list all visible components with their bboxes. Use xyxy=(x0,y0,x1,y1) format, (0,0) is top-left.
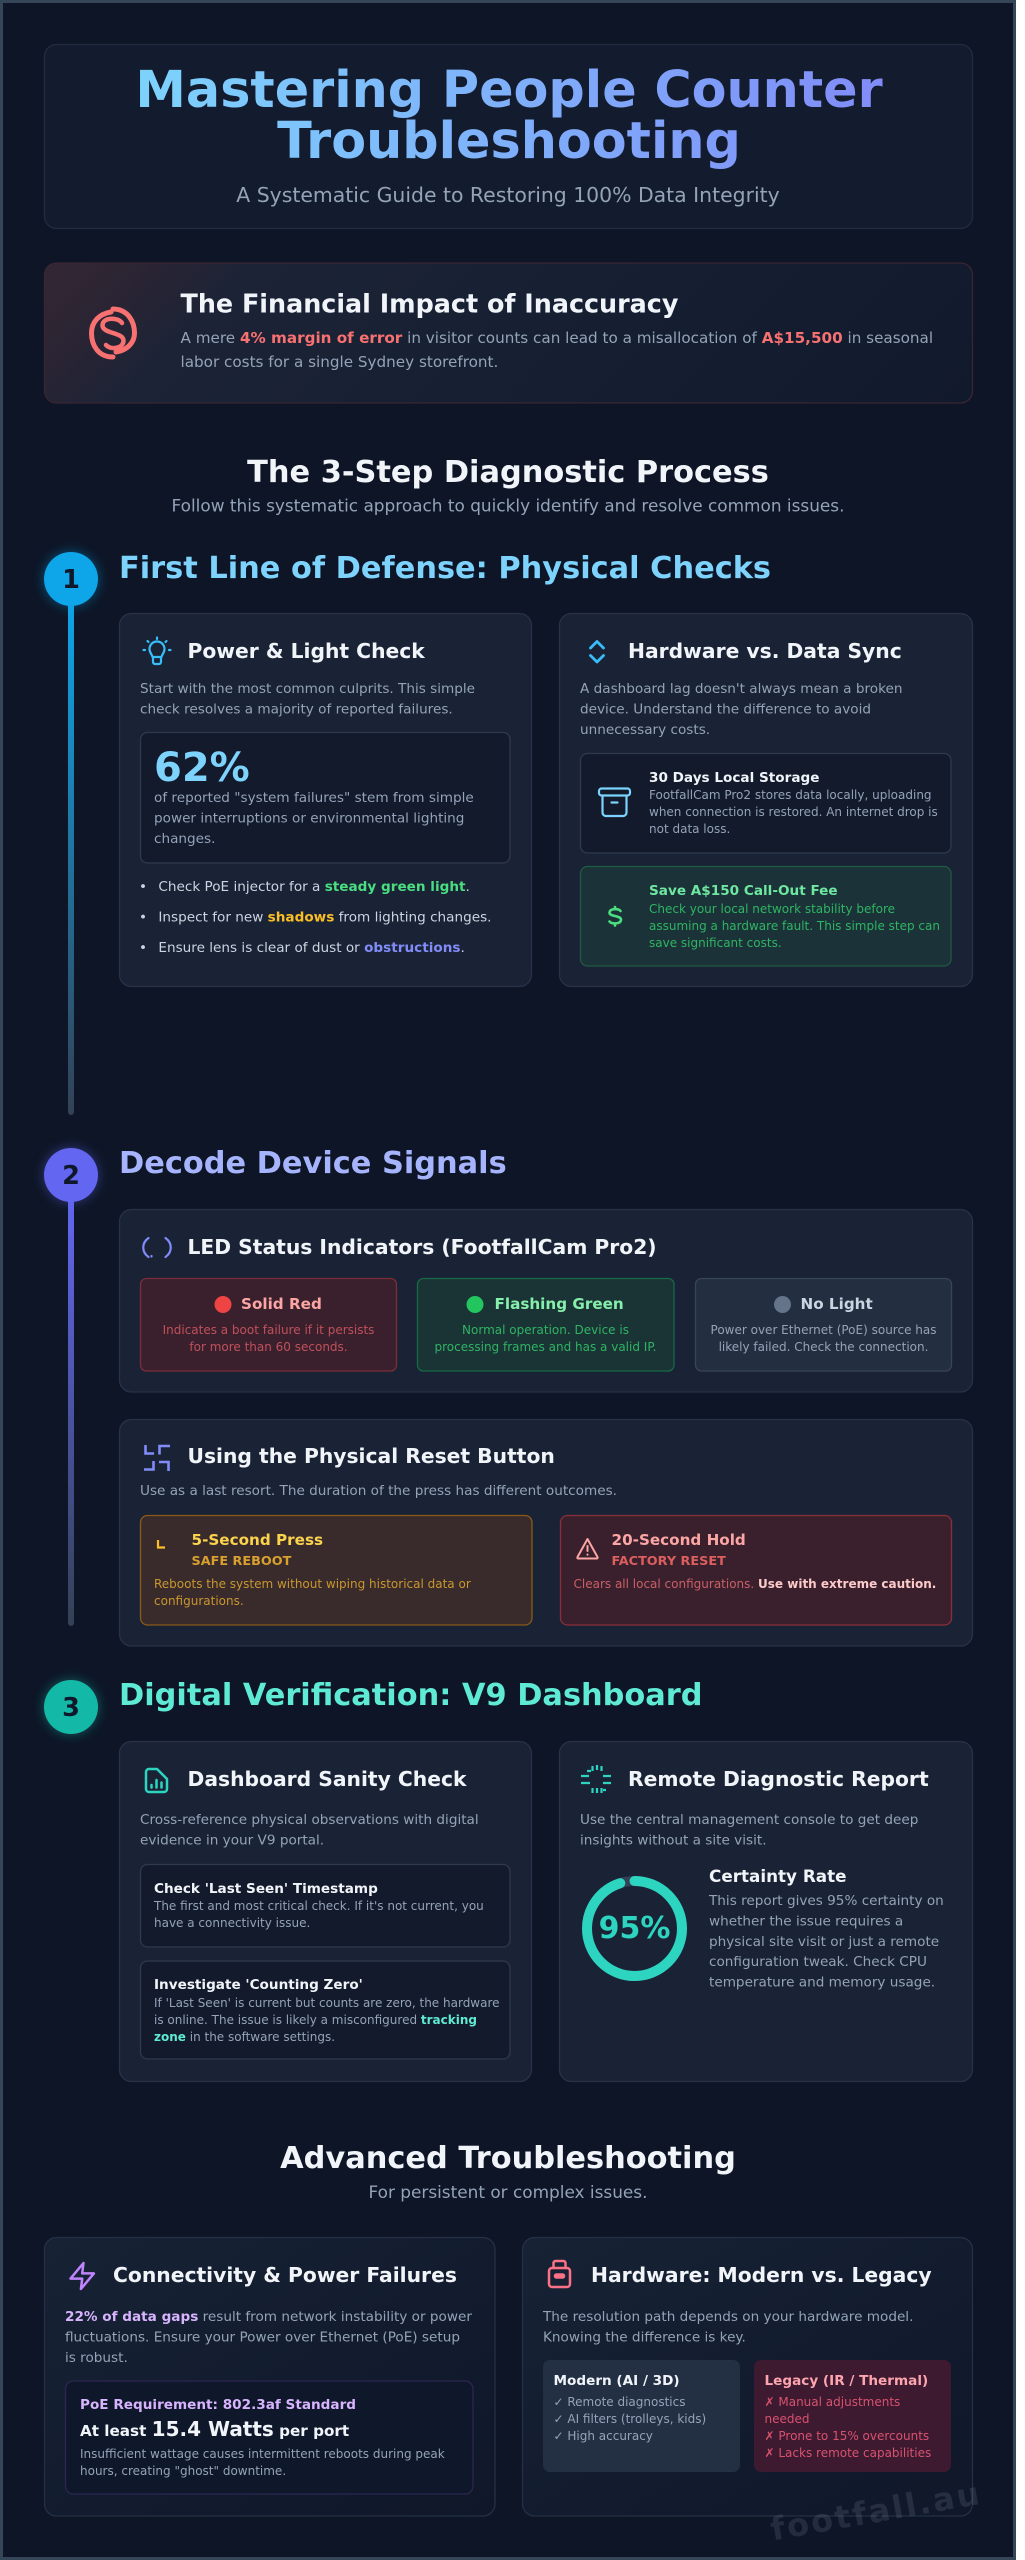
step badge 2: 2 xyxy=(62,1161,80,1191)
card description: insights without a site visit. xyxy=(580,1832,767,1848)
donut chart: 95%: 95% xyxy=(599,1911,670,1946)
option: 5-second press: 5-Second Press xyxy=(192,1531,323,1549)
card description: unnecessary costs. xyxy=(580,722,710,738)
card description xyxy=(542,2309,913,2346)
option: 20-second hold: Clears all local configurations. Use with extreme caution. xyxy=(574,1577,936,1591)
step 2 heading: Decode Device Signals xyxy=(119,1146,507,1181)
callout: PoE requirement: hours, creating "ghost" downtime. xyxy=(80,2464,286,2478)
card description: Use the central management console to get deep xyxy=(580,1812,918,1828)
panel: dashboard sanity check xyxy=(120,1742,532,2082)
alert text: A mere 4% margin of error in visitor counts can lead to a misallocation of A$15,500 in seasonal xyxy=(180,329,933,347)
step 1 heading: First Line of Defense: Physical Checks xyxy=(119,551,771,586)
check: last seen: The first and most critical check. If it's not current, you xyxy=(153,1899,484,1913)
card description: Knowing the difference is key. xyxy=(543,2330,746,2346)
check: counting zero: If 'Last Seen' is current but counts are zero, the hardware xyxy=(154,1996,500,2010)
panel: financial impact alert xyxy=(44,263,972,403)
callout: PoE requirement xyxy=(66,2381,473,2494)
step badge 1: 1 xyxy=(62,565,80,595)
callout: call-out fee saving xyxy=(580,866,951,966)
status: solid red: Indicates a boot failure if it persists xyxy=(163,1323,374,1337)
callout: local storage xyxy=(580,754,951,853)
card description: device. Understand the difference to avoid xyxy=(580,702,871,718)
card description: Use as a last resort. The duration of the press has different outcomes. xyxy=(140,1483,617,1499)
card title: Remote Diagnostic Report xyxy=(628,1767,929,1791)
option: 5-second press xyxy=(140,1516,532,1625)
status: no light: likely failed. Check the connection. xyxy=(719,1340,928,1354)
callout: PoE requirement: PoE Requirement: 802.3af Standard xyxy=(80,2397,356,2413)
callout: call-out fee saving: save significant costs. xyxy=(649,936,782,950)
callout: PoE requirement: At least 15.4 Watts per port xyxy=(80,2417,349,2441)
icon: lightning xyxy=(70,2263,94,2289)
icon: archive box xyxy=(599,788,630,816)
callout: local storage: 30 Days Local Storage xyxy=(649,770,819,786)
panel: connectivity and power failures xyxy=(44,2238,495,2516)
check: last seen: Check 'Last Seen' Timestamp xyxy=(154,1881,378,1897)
option: 5-second press: Reboots the system without wiping historical data or xyxy=(154,1577,471,1591)
title xyxy=(135,60,883,170)
card description: check resolves a majority of reported failures. xyxy=(140,702,453,718)
option: 5-second press: configurations. xyxy=(154,1594,244,1608)
section heading: advanced troubleshooting xyxy=(280,2141,736,2202)
status: no light xyxy=(696,1278,952,1371)
check: counting zero xyxy=(140,1961,510,2059)
card description: fluctuations. Ensure your Power over Ethernet (PoE) setup xyxy=(65,2330,460,2346)
card description: The resolution path depends on your hardware model. xyxy=(542,2309,913,2325)
certainty text: This report gives 95% certainty on xyxy=(708,1893,944,1909)
comparison: modern: Modern (AI / 3D) xyxy=(554,2373,680,2389)
panel: physical reset button xyxy=(120,1420,972,1646)
panel: hardware modern vs legacy xyxy=(522,2238,972,2516)
card title: LED Status Indicators (FootfallCam Pro2) xyxy=(188,1235,657,1259)
certainty text: physical site visit or just a remote xyxy=(709,1934,939,1950)
comparison: legacy: ✗ Manual adjustments xyxy=(764,2395,900,2409)
card description xyxy=(65,2309,472,2366)
section heading: 3-step process: The 3-Step Diagnostic Process xyxy=(247,455,769,490)
check: counting zero: zone in the software settings. xyxy=(154,2030,335,2044)
card description: Start with the most common culprits. This simple xyxy=(140,681,475,697)
comparison: modern: ✓ Remote diagnostics xyxy=(554,2395,686,2409)
status: solid red: Solid Red xyxy=(241,1295,322,1313)
panel: header xyxy=(44,44,972,228)
certainty text: whether the issue requires a xyxy=(709,1914,903,1930)
card title: Connectivity & Power Failures xyxy=(113,2263,457,2287)
title: Troubleshooting xyxy=(277,111,741,170)
option: 20-second hold xyxy=(560,1516,952,1625)
check: last seen: have a connectivity issue. xyxy=(154,1916,310,1930)
card title: Hardware vs. Data Sync xyxy=(628,639,902,663)
callout: PoE requirement: Insufficient wattage causes intermittent reboots during peak xyxy=(80,2447,445,2461)
icon: chevrons xyxy=(590,642,604,662)
timeline line: step 1 xyxy=(68,600,74,1115)
comparison: modern: ✓ High accuracy xyxy=(554,2429,653,2443)
status: flashing green xyxy=(418,1278,674,1371)
checklist: Ensure lens is clear of dust or obstructions. xyxy=(158,940,465,956)
title: Mastering People Counter xyxy=(135,60,883,119)
card title: Power & Light Check xyxy=(188,639,425,663)
panel: LED status indicators xyxy=(120,1210,972,1392)
icon: minimize corners xyxy=(144,1445,170,1471)
icon: file chart xyxy=(146,1769,167,1792)
icon: warning triangle xyxy=(577,1539,598,1558)
callout: call-out fee saving: assuming a hardware fault. This simple step can xyxy=(649,919,940,933)
certainty text xyxy=(708,1866,944,1990)
comparison: legacy: ✗ Prone to 15% overcounts xyxy=(764,2429,929,2443)
section heading: 3-step process: Follow this systematic approach to quickly identify and resolve common issues. xyxy=(172,496,844,516)
alert text: labor costs for a single Sydney storefront. xyxy=(180,353,498,371)
callout: local storage: FootfallCam Pro2 stores data locally, uploading xyxy=(649,788,932,802)
card description xyxy=(580,681,902,738)
card description: is robust. xyxy=(65,2350,128,2366)
comparison: modern: ✓ AI filters (trolleys, kids) xyxy=(554,2412,706,2426)
status: solid red: for more than 60 seconds. xyxy=(189,1340,348,1354)
comparison: legacy: ✗ Lacks remote capabilities xyxy=(764,2446,931,2460)
stat box: 62%: power interruptions or environmental lighting xyxy=(154,810,464,826)
certainty text: configuration tweak. Check CPU xyxy=(709,1954,927,1970)
checklist: • xyxy=(139,879,147,895)
comparison: legacy xyxy=(754,2360,951,2472)
subtitle: A Systematic Guide to Restoring 100% Data Integrity xyxy=(236,183,780,207)
status: no light: No Light xyxy=(800,1295,873,1313)
stat box: 62%: changes. xyxy=(154,831,215,847)
panel: power and light check xyxy=(120,614,532,986)
check: counting zero: Investigate 'Counting Zero' xyxy=(154,1977,363,1993)
card description: Cross-reference physical observations with digital xyxy=(140,1812,479,1828)
step badge 3: 3 xyxy=(62,1693,80,1723)
status: no light: Power over Ethernet (PoE) source has xyxy=(711,1323,936,1337)
icon: LED arcs xyxy=(143,1238,171,1257)
panel: hardware vs data sync xyxy=(560,614,972,986)
card description: A dashboard lag doesn't always mean a broken xyxy=(580,681,902,697)
checklist: • xyxy=(139,910,147,926)
timeline line: step 2 xyxy=(68,1196,74,1626)
card title: Hardware: Modern vs. Legacy xyxy=(591,2263,932,2287)
card description: 22% of data gaps result from network instability or power xyxy=(65,2309,472,2325)
status: flashing green: Normal operation. Device is xyxy=(462,1323,629,1337)
checklist: • xyxy=(139,940,147,956)
comparison: legacy: Legacy (IR / Thermal) xyxy=(764,2373,928,2389)
section heading: advanced troubleshooting: Advanced Troubleshooting xyxy=(280,2141,736,2176)
option: 20-second hold: 20-Second Hold xyxy=(612,1531,746,1549)
donut chart: 95% xyxy=(587,1881,682,1976)
checklist: Inspect for new shadows from lighting changes. xyxy=(158,910,492,926)
icon: clock hand xyxy=(158,1540,165,1548)
icon: dollar circle xyxy=(92,309,134,357)
alert heading: The Financial Impact of Inaccuracy xyxy=(180,288,679,318)
card description xyxy=(140,681,475,718)
certainty text: temperature and memory usage. xyxy=(709,1974,935,1990)
comparison: legacy: needed xyxy=(764,2412,810,2426)
icon: chip ticks xyxy=(581,1765,611,1793)
check: counting zero: is online. The issue is likely a misconfigured tracking xyxy=(154,2013,477,2027)
step badge 2 xyxy=(44,1148,98,1202)
certainty text: Certainty Rate xyxy=(709,1866,846,1886)
callout: call-out fee saving: Check your local network stability before xyxy=(649,902,895,916)
callout: call-out fee saving: Save A$150 Call-Out Fee xyxy=(649,883,838,899)
status: flashing green: processing frames and has a valid IP. xyxy=(434,1340,656,1354)
stat box: 62%: of reported "system failures" stem from simple xyxy=(154,790,474,806)
card description xyxy=(140,1812,479,1848)
icon: dollar xyxy=(609,907,621,926)
callout: local storage: not data loss. xyxy=(649,822,730,836)
icon: battery xyxy=(549,2261,570,2287)
stat box: 62% xyxy=(140,732,510,863)
option: 5-second press: SAFE REBOOT xyxy=(192,1554,292,1569)
check: last seen xyxy=(140,1864,510,1947)
panel: remote diagnostic report xyxy=(560,1742,972,2082)
watermark: footfall.au xyxy=(768,2474,985,2548)
checklist xyxy=(139,879,492,956)
stat box: 62%: 62% xyxy=(154,745,250,791)
checklist: Check PoE injector for a steady green light. xyxy=(158,879,470,895)
step 3 heading: Digital Verification: V9 Dashboard xyxy=(119,1678,703,1713)
callout: local storage: when connection is restored. An internet drop is xyxy=(649,805,938,819)
card title: Using the Physical Reset Button xyxy=(188,1444,555,1468)
section heading: advanced troubleshooting: For persistent or complex issues. xyxy=(369,2182,647,2202)
status: solid red xyxy=(140,1278,396,1371)
section heading: 3-step process xyxy=(172,455,844,516)
card description xyxy=(580,1812,918,1848)
icon: light bulb xyxy=(144,638,170,664)
card description: evidence in your V9 portal. xyxy=(140,1832,324,1848)
option: 20-second hold: FACTORY RESET xyxy=(612,1554,726,1569)
alert text xyxy=(180,329,933,371)
step badge 1 xyxy=(44,552,98,606)
step badge 3 xyxy=(44,1680,98,1734)
comparison: modern xyxy=(543,2360,740,2472)
card title: Dashboard Sanity Check xyxy=(188,1767,467,1791)
status: flashing green: Flashing Green xyxy=(494,1295,624,1313)
